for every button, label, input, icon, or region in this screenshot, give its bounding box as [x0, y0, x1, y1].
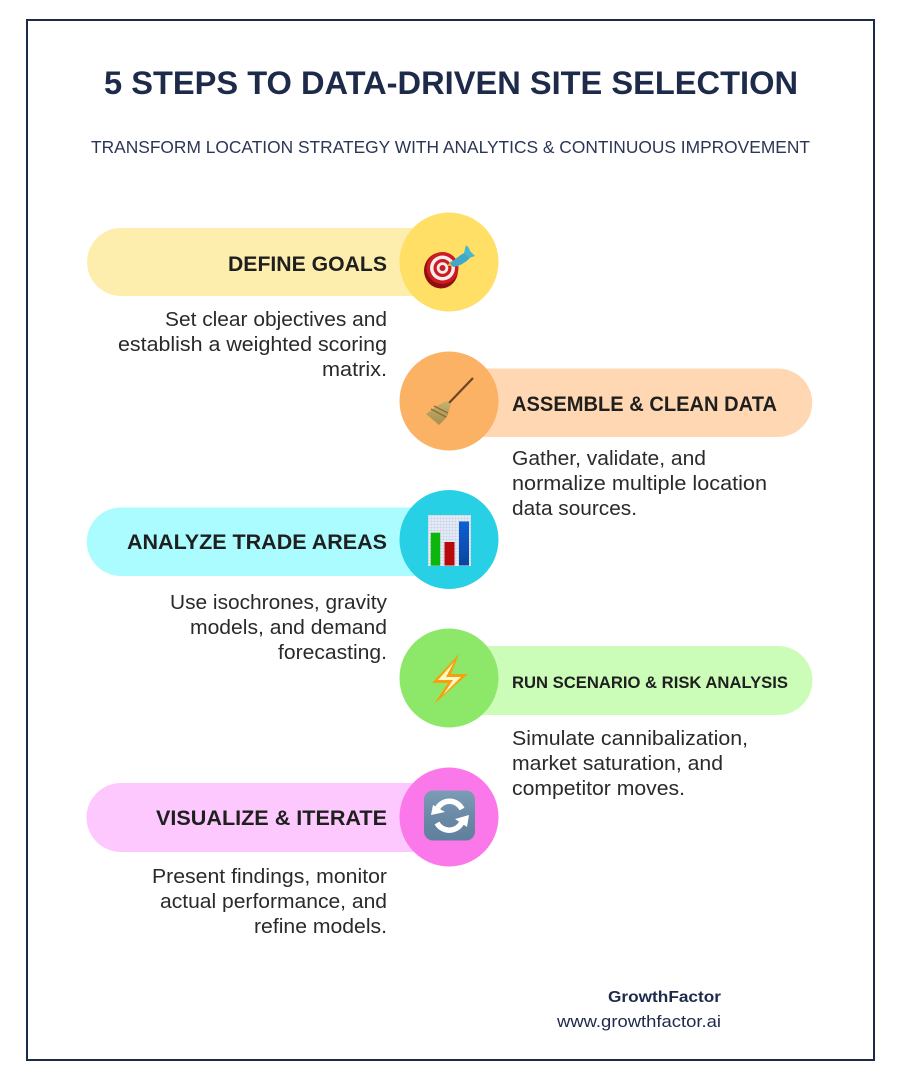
step 1: define goals	[87, 212, 499, 381]
step 5 heading: VISUALIZE & ITERATE	[156, 807, 387, 830]
step 1 heading: DEFINE GOALS	[228, 253, 387, 276]
step 5 description: Present findings, monitor	[152, 866, 387, 888]
step 4 description: Simulate cannibalization,	[512, 728, 748, 750]
step 2 description: Gather, validate, and	[512, 448, 706, 470]
footer website: www.growthfactor.ai	[556, 1013, 721, 1031]
step 2 description: data sources.	[512, 498, 637, 520]
step 5 description: actual performance, and	[160, 891, 387, 913]
step 4 description	[512, 728, 748, 800]
step 5 description: refine models.	[254, 916, 387, 938]
step 3 circle	[400, 490, 498, 589]
step 5 description	[152, 866, 387, 938]
icon: refresh arrows	[424, 790, 475, 840]
step 1 pill	[87, 228, 449, 296]
step 4 circle	[400, 628, 498, 728]
step 3 heading: ANALYZE TRADE AREAS	[127, 531, 387, 554]
icon: broom	[426, 378, 473, 425]
step 1 description: establish a weighted scoring	[118, 334, 387, 356]
step 1 description	[118, 309, 387, 381]
step 2 description: normalize multiple location	[512, 473, 767, 495]
step 2 pill	[449, 368, 812, 437]
step 2 description	[512, 448, 767, 520]
step 4: run scenario and risk analysis	[400, 628, 813, 800]
step 4 pill	[449, 646, 813, 715]
step 3 pill	[87, 508, 449, 576]
step 3 description: forecasting.	[278, 642, 387, 664]
step 4 description: competitor moves.	[512, 778, 685, 800]
icon: lightning bolt	[432, 654, 468, 704]
step 3 description: Use isochrones, gravity	[170, 592, 387, 614]
step 2: assemble and clean data	[400, 352, 812, 520]
step 4 description: market saturation, and	[512, 753, 723, 775]
footer brand name: GrowthFactor	[608, 989, 721, 1006]
step 1 description: Set clear objectives and	[165, 309, 387, 331]
step 5: visualize and iterate	[87, 768, 499, 938]
step 1 description: matrix.	[322, 359, 387, 381]
step 2 circle	[400, 352, 498, 450]
title: 5 STEPS TO DATA-DRIVEN SITE SELECTION	[104, 65, 798, 101]
icon: bar chart	[428, 515, 471, 566]
step 3: analyze trade areas	[87, 490, 498, 664]
step 4 heading: RUN SCENARIO & RISK ANALYSIS	[512, 674, 788, 692]
step 3 description: models, and demand	[190, 617, 387, 639]
step 3 description	[170, 592, 387, 664]
step 5 pill	[87, 783, 449, 852]
subtitle: TRANSFORM LOCATION STRATEGY WITH ANALYTICS & CONTINUOUS IMPROVEMENT	[91, 137, 810, 157]
icon: dart target	[424, 245, 475, 288]
step 5 circle	[400, 768, 498, 866]
step 2 heading: ASSEMBLE & CLEAN DATA	[512, 393, 777, 416]
step 1 circle	[400, 212, 498, 312]
